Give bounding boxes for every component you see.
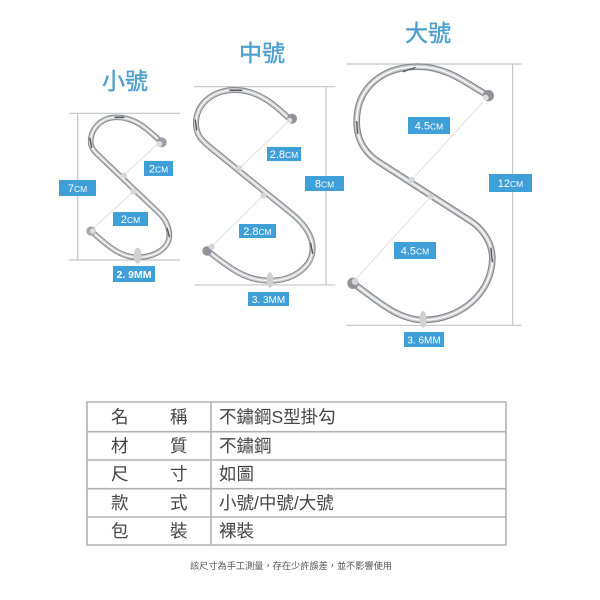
label: 4.5cm upper: 4.5CM [415, 120, 443, 132]
row: size: 尺 [111, 464, 128, 484]
row: material: 不鏽鋼 [219, 436, 272, 456]
medium hook diagram [194, 87, 344, 306]
footnote: 該尺寸為手工測量，存在少許誤差，並不影響使用 [190, 560, 392, 571]
label: 2.8cm lower [239, 224, 276, 238]
row: material: 質 [170, 436, 188, 456]
label: 2.8cm upper: 2.8CM [270, 149, 298, 161]
label: 12cm [489, 174, 532, 192]
large hook illustration [347, 64, 522, 328]
row: material [111, 436, 272, 456]
small hook diagram [59, 113, 180, 282]
row: size: 如圖 [219, 464, 254, 484]
label: 8cm: 8CM [315, 178, 334, 190]
heading: medium: 中號 [239, 40, 285, 66]
row: material: 材 [111, 436, 128, 456]
large hook diagram [347, 64, 532, 347]
heading: small: 小號 [102, 68, 148, 94]
row: style: 小號/中號/大號 [219, 493, 334, 513]
row: name: 不鏽鋼S型掛勾 [219, 407, 336, 427]
label: 2cm lower [113, 212, 148, 226]
label: 2.8cm lower: 2.8CM [243, 226, 272, 238]
label: 12cm: 12CM [498, 178, 523, 190]
row: size [111, 464, 254, 484]
row: style: 式 [170, 493, 188, 513]
label: 7cm: 7CM [68, 183, 87, 195]
label: 4.5cm lower [394, 242, 436, 259]
label: 4.5cm upper [408, 117, 450, 134]
heading: large: 大號 [405, 20, 451, 46]
label: 7cm [59, 180, 96, 196]
label: 8cm [305, 176, 344, 191]
row: packaging [111, 521, 254, 541]
label: 3.3mm: 3. 3MM [252, 295, 285, 306]
table grid [87, 402, 506, 545]
row: style [111, 493, 334, 513]
label: 3.6mm: 3. 6MM [407, 336, 441, 346]
row: size: 寸 [170, 464, 188, 484]
row: packaging: 裸裝 [219, 521, 254, 541]
row: packaging: 裝 [170, 521, 188, 541]
label: 2.9mm: 2. 9MM [116, 269, 152, 281]
row: name: 名 [111, 407, 128, 427]
row: packaging: 包 [111, 521, 128, 541]
row: name: 稱 [170, 407, 188, 427]
label: 3.3mm [248, 292, 289, 306]
label: 4.5cm lower: 4.5CM [401, 246, 429, 258]
small hook illustration [69, 113, 180, 264]
row: style: 款 [111, 493, 128, 513]
label: 2cm upper: 2CM [149, 164, 168, 176]
label: 2cm upper [144, 161, 173, 176]
label: 3.6mm [404, 332, 444, 347]
label: 2cm lower: 2CM [121, 214, 140, 226]
row: name [111, 407, 336, 427]
specification table [87, 402, 506, 545]
label: 2.9mm [113, 266, 155, 282]
medium hook illustration [194, 87, 335, 288]
